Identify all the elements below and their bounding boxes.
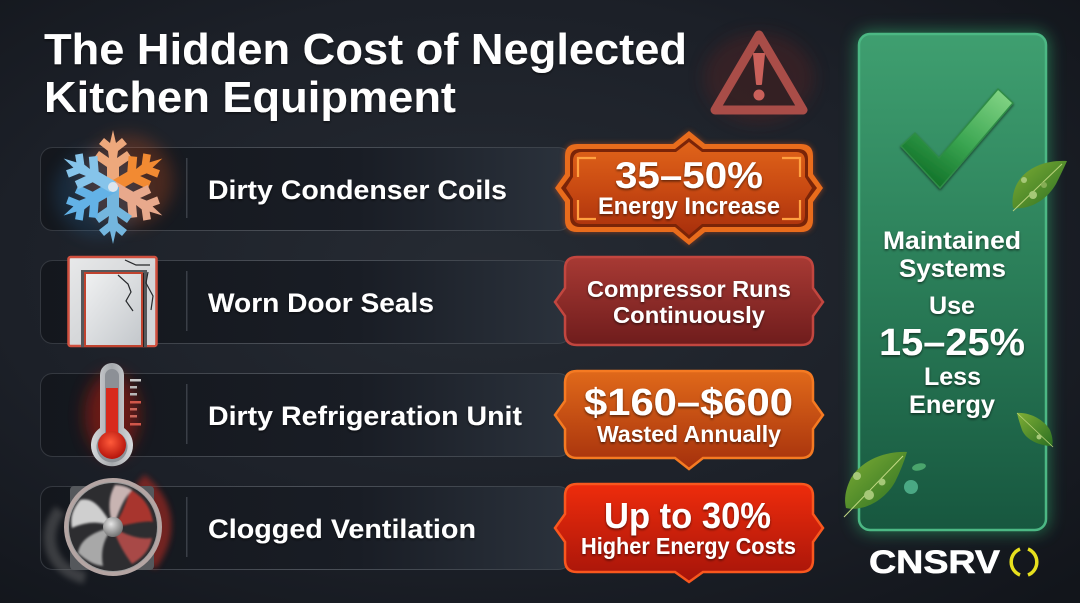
callout: compressor runs continuously: Continuously xyxy=(613,302,765,328)
panel text: Systems xyxy=(899,255,1006,283)
icon: water droplets xyxy=(904,462,927,494)
panel: clogged ventilation xyxy=(40,480,570,578)
icon: thermometer xyxy=(85,363,141,466)
panel text: Use xyxy=(929,292,975,320)
icon: check mark xyxy=(901,89,1013,188)
callout: compressor runs continuously xyxy=(555,257,823,345)
logo: CNSRV: CNSRV xyxy=(869,544,1001,580)
callout: 35-50% energy increase: 35–50% xyxy=(615,155,763,196)
title xyxy=(44,25,687,122)
row divider xyxy=(186,497,188,557)
row divider xyxy=(186,158,188,218)
callout: 35-50% energy increase: Energy Increase xyxy=(598,193,780,220)
icon: snowflake xyxy=(54,130,173,244)
row background xyxy=(40,260,570,344)
panel text: 15–25% xyxy=(879,322,1025,364)
panel: worn door seals xyxy=(40,257,570,347)
panel glow xyxy=(856,31,1049,533)
callout: up to 30% higher energy costs: Higher Energy Costs xyxy=(581,533,796,559)
panel text xyxy=(879,227,1025,419)
icon: logo ring xyxy=(1011,549,1037,575)
panel text: Less xyxy=(924,363,981,391)
icon: leaf middle right xyxy=(1017,413,1053,447)
callout: 35-50% energy increase xyxy=(555,131,823,245)
row label: Dirty Condenser Coils xyxy=(208,175,507,205)
callout: up to 30% higher energy costs xyxy=(555,484,823,582)
row divider xyxy=(186,384,188,444)
panel: dirty refrigeration unit xyxy=(40,363,570,466)
icon: leaf top right xyxy=(1013,161,1067,211)
title: The Hidden Cost of Neglected xyxy=(44,25,687,74)
row label: Dirty Refrigeration Unit xyxy=(208,401,522,431)
icon: cracked door xyxy=(68,257,156,347)
panel: maintained systems xyxy=(844,31,1067,533)
callout: $160-$600 wasted annually xyxy=(555,371,823,469)
icon: fan xyxy=(50,480,164,578)
callout: compressor runs continuously: Compressor Runs xyxy=(587,276,791,302)
callout: $160-$600 wasted annually: $160–$600 xyxy=(584,382,793,424)
row background xyxy=(40,374,570,456)
title: Kitchen Equipment xyxy=(44,73,456,122)
callout: up to 30% higher energy costs: Up to 30% xyxy=(604,495,771,536)
panel body xyxy=(859,34,1046,530)
logo: CNSRV xyxy=(869,544,1037,580)
row label: Clogged Ventilation xyxy=(208,514,476,544)
callout: $160-$600 wasted annually: Wasted Annually xyxy=(597,421,781,447)
panel: dirty condenser coils xyxy=(40,130,570,244)
icon: warning triangle xyxy=(704,33,814,123)
icon: leaf bottom left xyxy=(844,452,907,517)
row background xyxy=(40,148,570,230)
panel text: Maintained xyxy=(883,227,1021,255)
row divider xyxy=(186,271,188,331)
row background xyxy=(40,486,570,570)
row label: Worn Door Seals xyxy=(208,288,434,318)
panel text: Energy xyxy=(909,391,995,419)
